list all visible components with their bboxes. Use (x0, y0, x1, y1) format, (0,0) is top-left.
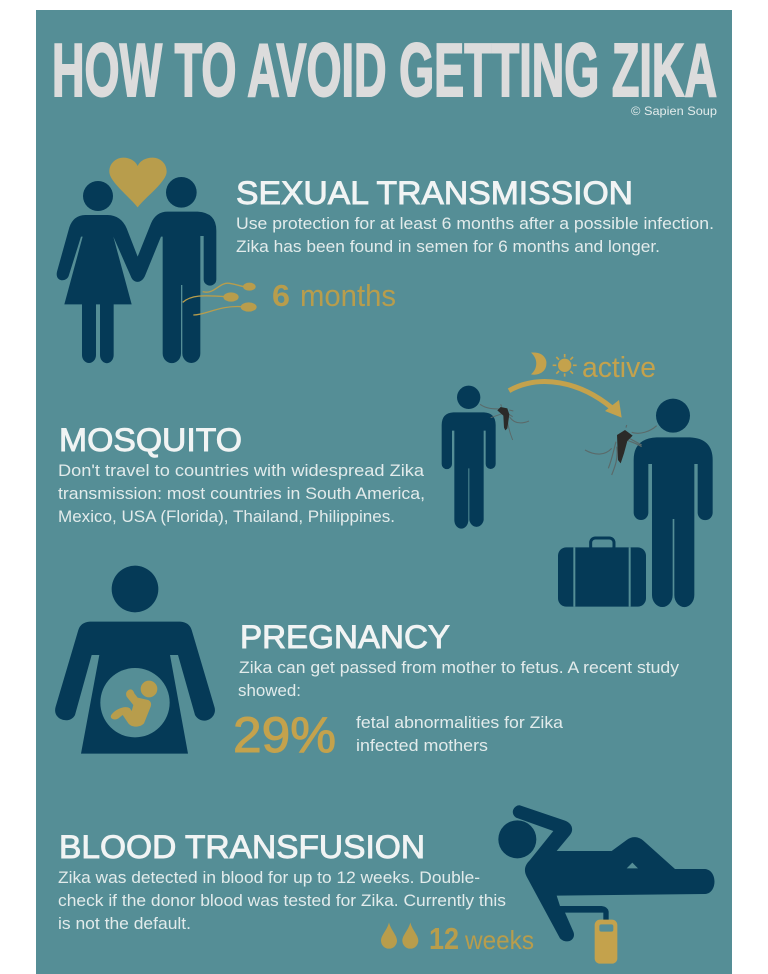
text block: showed: (238, 681, 301, 700)
label: active: active (582, 352, 656, 384)
icon: heart (109, 158, 167, 207)
stat: 6 months: months (300, 278, 396, 313)
stat: 12 weeks: 12 (429, 921, 459, 956)
text block: Zika has been found in semen for 6 months and longer. (236, 237, 660, 256)
stat caption: infected mothers (356, 736, 488, 755)
credit: © Sapien Soup (631, 104, 717, 118)
panel: pregnancy (55, 566, 680, 763)
text block: Don't travel to countries with widespread Zika (58, 461, 425, 480)
text block (236, 214, 714, 256)
text block: Use protection for at least 6 months after a possible infection. (236, 214, 714, 233)
icon: sperm (183, 283, 257, 315)
icon: reclining person (498, 805, 714, 941)
text block: Zika was detected in blood for up to 12 weeks. Double- (58, 868, 480, 887)
icon: small person (442, 386, 496, 529)
heading: SEXUAL TRANSMISSION (236, 175, 633, 211)
icon: sun (553, 354, 577, 377)
icon: moon (531, 352, 546, 375)
arrow: travel (509, 382, 622, 418)
panel: mosquito (58, 352, 713, 607)
text block (58, 868, 506, 933)
heading: BLOOD TRANSFUSION (59, 829, 425, 865)
icon: couple holding hands (57, 177, 216, 363)
heading: PREGNANCY (240, 619, 450, 655)
icon: small mosquito (480, 404, 529, 440)
text block: transmission: most countries in South America, (58, 484, 425, 503)
text block: is not the default. (58, 914, 191, 933)
icon: suitcase (558, 538, 646, 607)
icon: large person (634, 399, 713, 607)
text block: check if the donor blood was tested for Zika. Currently this (58, 891, 506, 910)
stat: 29%: 29% (233, 707, 336, 763)
panel: blood transfusion (58, 805, 714, 964)
text block: Zika can get passed from mother to fetus. A recent study (239, 658, 680, 677)
text block: Mexico, USA (Florida), Thailand, Philippines. (58, 507, 395, 526)
heading: MOSQUITO (59, 422, 242, 458)
icon: large mosquito (585, 425, 657, 475)
text block (58, 461, 425, 526)
stat caption (356, 713, 564, 755)
stat: 6 months: 6 (272, 278, 290, 313)
stat caption: fetal abnormalities for Zika (356, 713, 564, 732)
text block (238, 658, 680, 700)
icon: baby (111, 681, 157, 727)
icon: blood drops (381, 922, 418, 949)
icon: pregnant woman (55, 566, 215, 754)
panel: sexual transmission (57, 158, 714, 363)
icon: blood bag (595, 920, 617, 964)
stat: 12 weeks: weeks (464, 925, 534, 955)
stat: 12 weeks (429, 921, 534, 956)
